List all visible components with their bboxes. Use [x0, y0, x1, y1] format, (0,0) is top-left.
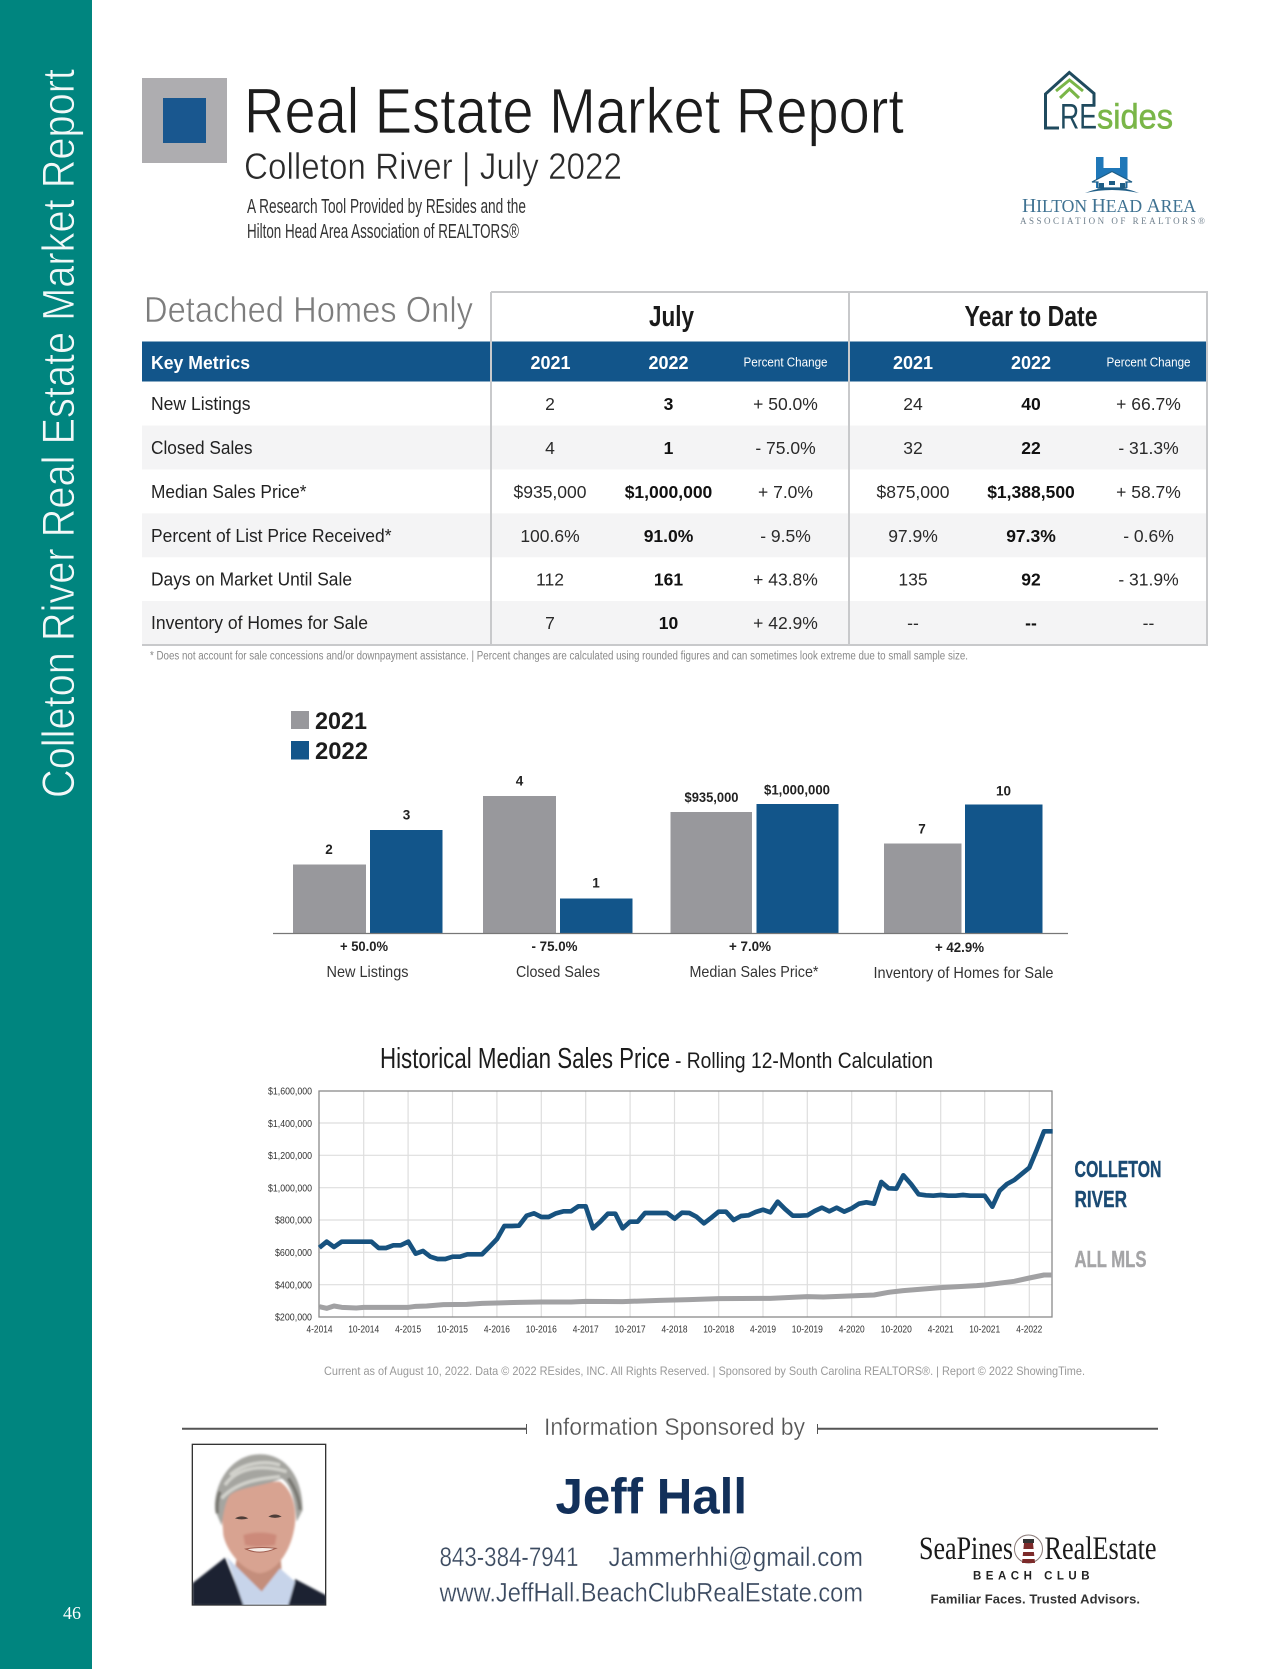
bar value labels: 3	[403, 808, 411, 822]
row: Days on Market Until Sale: + 43.8%	[753, 570, 818, 590]
sponsor heading with rules	[182, 1414, 1158, 1441]
header icon: gray square with blue square	[142, 78, 227, 163]
row: Days on Market Until Sale: 161	[654, 570, 683, 590]
y axis labels: $1,600,000	[268, 1086, 312, 1098]
bar category labels: Inventory of Homes for Sale	[874, 965, 1054, 982]
series label: All MLS: ALL MLS	[1074, 1246, 1146, 1272]
y axis labels: $1,000,000	[268, 1183, 312, 1194]
x axis labels: 4-2014	[306, 1324, 333, 1336]
bars	[293, 796, 1042, 934]
table header labels: 2022	[1011, 353, 1051, 373]
line chart heading	[380, 1043, 933, 1075]
row: Closed Sales: 4	[545, 438, 555, 458]
bar value labels: $1,000,000	[764, 782, 830, 798]
column group heading: Year to Date: Year to Date	[964, 301, 1098, 333]
table footnote: * Does not account for sale concessions and/or downpayment assistance. | Percent changes are calculated using rounded figures and can sometimes look extreme due to small sample size.	[150, 650, 968, 662]
sponsor contact details: 843-384-7941	[440, 1542, 578, 1572]
sponsor contact details: www.JeffHall.BeachClubRealEstate.com	[439, 1578, 863, 1608]
row: Days on Market Until Sale: - 31.9%	[1118, 570, 1179, 590]
row: Median Sales Price: + 58.7%	[1116, 482, 1181, 502]
logo: REsides: sides	[1097, 97, 1173, 136]
chart grid	[319, 1091, 1052, 1317]
table header labels: Percent Change	[1106, 354, 1190, 370]
logo: Hilton Head Area Association of Realtors: ASSOCIATION OF REALTORS®	[1020, 216, 1205, 226]
x axis labels: 4-2018	[662, 1324, 688, 1336]
title: Real Estate Market Report	[244, 75, 904, 147]
row: Days on Market Until Sale: 92	[1021, 570, 1041, 590]
table header labels: 2021	[893, 353, 933, 373]
bar value labels: 2	[325, 842, 333, 857]
subtitle: Colleton River | July 2022	[244, 146, 622, 187]
row: Inventory of Homes for Sale: --	[1143, 613, 1154, 633]
row: Percent of List Price Received: Percent of List Price Received*	[151, 526, 392, 546]
row: Median Sales Price: $1,388,500	[987, 482, 1075, 502]
bar value labels: 7	[918, 822, 926, 836]
bar category labels: New Listings	[326, 964, 408, 981]
y axis labels: $400,000	[275, 1280, 312, 1291]
tool description	[247, 196, 526, 243]
series label: Colleton River	[1074, 1156, 1162, 1212]
row: New Listings: 40	[1021, 394, 1041, 414]
heading: Detached Homes Only: Detached Homes Only	[144, 289, 473, 330]
y axis labels: $200,000	[275, 1312, 312, 1324]
sponsor contact details	[439, 1542, 863, 1608]
row: Closed Sales: - 31.3%	[1118, 438, 1179, 458]
bar value labels: $935,000	[684, 790, 738, 805]
row: Inventory of Homes for Sale	[151, 613, 1154, 633]
table zebra stripes	[142, 426, 1207, 645]
x axis labels: 4-2016	[484, 1324, 510, 1336]
series: All MLS	[319, 1275, 1053, 1308]
line chart: historical median sales price	[268, 1086, 1053, 1336]
row: Inventory of Homes for Sale: Inventory of Homes for Sale	[151, 613, 368, 633]
logo: Sea Pines Real Estate Beach Club	[919, 1531, 1156, 1606]
x axis labels: 4-2019	[750, 1324, 776, 1336]
row: Percent of List Price Received: 97.9%	[888, 526, 938, 546]
row: Percent of List Price Received	[151, 526, 1174, 546]
logo: Sea Pines Real Estate Beach Club: BEACH CLUB	[973, 1570, 1090, 1582]
x axis labels: 10-2020	[881, 1324, 912, 1336]
logo: REsides	[1044, 72, 1173, 136]
bar category labels: Median Sales Price*	[690, 964, 818, 981]
row: New Listings: + 50.0%	[753, 394, 818, 414]
bar percent labels: + 7.0%	[729, 938, 772, 954]
row: Percent of List Price Received: 100.6%	[520, 526, 580, 546]
y axis labels: $800,000	[275, 1216, 312, 1227]
chart legend	[291, 708, 368, 765]
table header labels: Key Metrics	[151, 352, 250, 373]
x axis labels: 4-2022	[1016, 1324, 1043, 1336]
bar value labels: 1	[592, 876, 600, 890]
row: Closed Sales	[151, 438, 1179, 458]
table header labels	[151, 352, 1190, 373]
x axis labels: 4-2015	[395, 1324, 421, 1336]
row: Median Sales Price: $1,000,000	[625, 482, 713, 502]
logo: REsides: RE	[1060, 97, 1097, 136]
bar chart: July comparison	[273, 708, 1068, 982]
bar value labels	[325, 774, 1011, 890]
row: Closed Sales: - 75.0%	[755, 438, 816, 458]
logo: Sea Pines Real Estate Beach Club: Familiar Faces. Trusted Advisors.	[930, 1592, 1140, 1606]
table header labels: Percent Change	[744, 354, 828, 370]
row: New Listings	[151, 394, 1181, 414]
bar percent labels: + 50.0%	[340, 938, 389, 954]
x axis labels: 4-2021	[928, 1324, 954, 1336]
page number: 46	[63, 1603, 81, 1623]
row: Days on Market Until Sale	[151, 570, 1179, 590]
table header band	[142, 342, 1207, 382]
row: Closed Sales: Closed Sales	[151, 438, 252, 458]
y axis labels: $1,400,000	[268, 1119, 312, 1130]
bar percent labels	[340, 938, 985, 955]
x axis labels: 10-2016	[526, 1324, 557, 1336]
row: New Listings: 24	[903, 394, 923, 414]
row: Closed Sales: 22	[1021, 438, 1041, 458]
sponsor portrait photo	[192, 1444, 327, 1606]
row: Days on Market Until Sale: 112	[536, 570, 564, 590]
sponsor heading with rules: Information Sponsored by	[544, 1414, 805, 1441]
sidebar	[0, 0, 92, 1669]
bar category labels	[326, 964, 1054, 982]
series: Colleton River	[319, 1131, 1053, 1259]
chart legend: 2022	[315, 738, 368, 765]
row: Percent of List Price Received: - 9.5%	[760, 526, 811, 546]
sponsor contact details: Jammerhhi@gmail.com	[608, 1542, 863, 1572]
x axis labels: 10-2021	[969, 1324, 1001, 1336]
row: New Listings: + 66.7%	[1116, 394, 1181, 414]
x axis labels: 10-2017	[615, 1324, 646, 1336]
row: Days on Market Until Sale: Days on Market Until Sale	[151, 570, 352, 590]
data source note: Current as of August 10, 2022. Data © 2022 REsides, INC. All Rights Reserved. | Sponsored by South Carolina REALTORS®. | Report © 2022 ShowingTime.	[324, 1364, 1085, 1378]
logo: Sea Pines Real Estate Beach Club: SeaPines	[919, 1531, 1013, 1567]
table header labels: 2021	[530, 353, 571, 373]
row: Median Sales Price: $935,000	[514, 482, 587, 502]
row: Median Sales Price	[151, 482, 1181, 502]
row: Closed Sales: 1	[664, 438, 674, 458]
line chart heading: Historical Median Sales Price	[380, 1043, 670, 1075]
table: key metrics	[142, 292, 1207, 645]
row: Percent of List Price Received: 91.0%	[644, 526, 694, 546]
chart legend: 2021	[315, 708, 367, 735]
row: Inventory of Homes for Sale: 10	[659, 613, 678, 633]
bar value labels: 10	[996, 784, 1011, 798]
row: Percent of List Price Received: - 0.6%	[1123, 526, 1174, 546]
row: Closed Sales: 32	[903, 438, 923, 458]
x axis labels: 10-2018	[703, 1324, 735, 1336]
x axis labels: 10-2019	[792, 1324, 823, 1336]
row: Percent of List Price Received: 97.3%	[1006, 526, 1056, 546]
bar value labels: 4	[516, 774, 524, 788]
tool description: Hilton Head Area Association of REALTORS®	[247, 221, 519, 243]
y axis labels: $600,000	[275, 1248, 312, 1259]
row: Inventory of Homes for Sale: --	[907, 613, 919, 633]
bar percent labels: - 75.0%	[532, 938, 578, 954]
bar category labels: Closed Sales	[516, 964, 600, 981]
series label: Colleton River: RIVER	[1074, 1186, 1127, 1212]
icon: lighthouse	[1014, 1535, 1042, 1563]
x axis labels: 4-2017	[573, 1324, 599, 1336]
row: Median Sales Price: Median Sales Price*	[151, 482, 306, 502]
logo: Sea Pines Real Estate Beach Club: RealEstate	[1044, 1531, 1156, 1567]
row: Inventory of Homes for Sale: 7	[545, 613, 555, 633]
row: Inventory of Homes for Sale: --	[1025, 613, 1037, 633]
row: New Listings: 3	[664, 394, 674, 414]
row: New Listings: New Listings	[151, 394, 250, 414]
row: Days on Market Until Sale: 135	[898, 570, 928, 590]
bar percent labels: + 42.9%	[935, 939, 985, 955]
row: Median Sales Price: $875,000	[876, 482, 950, 502]
column group heading: July: July	[649, 301, 694, 333]
table header labels: 2022	[648, 353, 689, 373]
y axis labels	[268, 1086, 312, 1324]
tool description: A Research Tool Provided by REsides and the	[247, 196, 526, 218]
logo: Hilton Head Area Association of Realtors: HILTON HEAD AREA	[1022, 195, 1196, 217]
sponsor name: Jeff Hall	[556, 1468, 747, 1524]
x axis labels: 10-2014	[348, 1324, 380, 1336]
x axis labels: 10-2015	[437, 1324, 468, 1336]
row: Median Sales Price: + 7.0%	[758, 482, 813, 502]
logo: Hilton Head Area Association of Realtors	[1020, 157, 1205, 226]
series label: Colleton River: COLLETON	[1074, 1156, 1162, 1182]
row: Inventory of Homes for Sale: + 42.9%	[753, 613, 818, 633]
y axis labels: $1,200,000	[268, 1151, 312, 1162]
x axis labels	[306, 1324, 1043, 1336]
row: New Listings: 2	[545, 394, 555, 414]
x axis labels: 4-2020	[839, 1324, 865, 1336]
line chart heading: - Rolling 12-Month Calculation	[675, 1048, 933, 1073]
